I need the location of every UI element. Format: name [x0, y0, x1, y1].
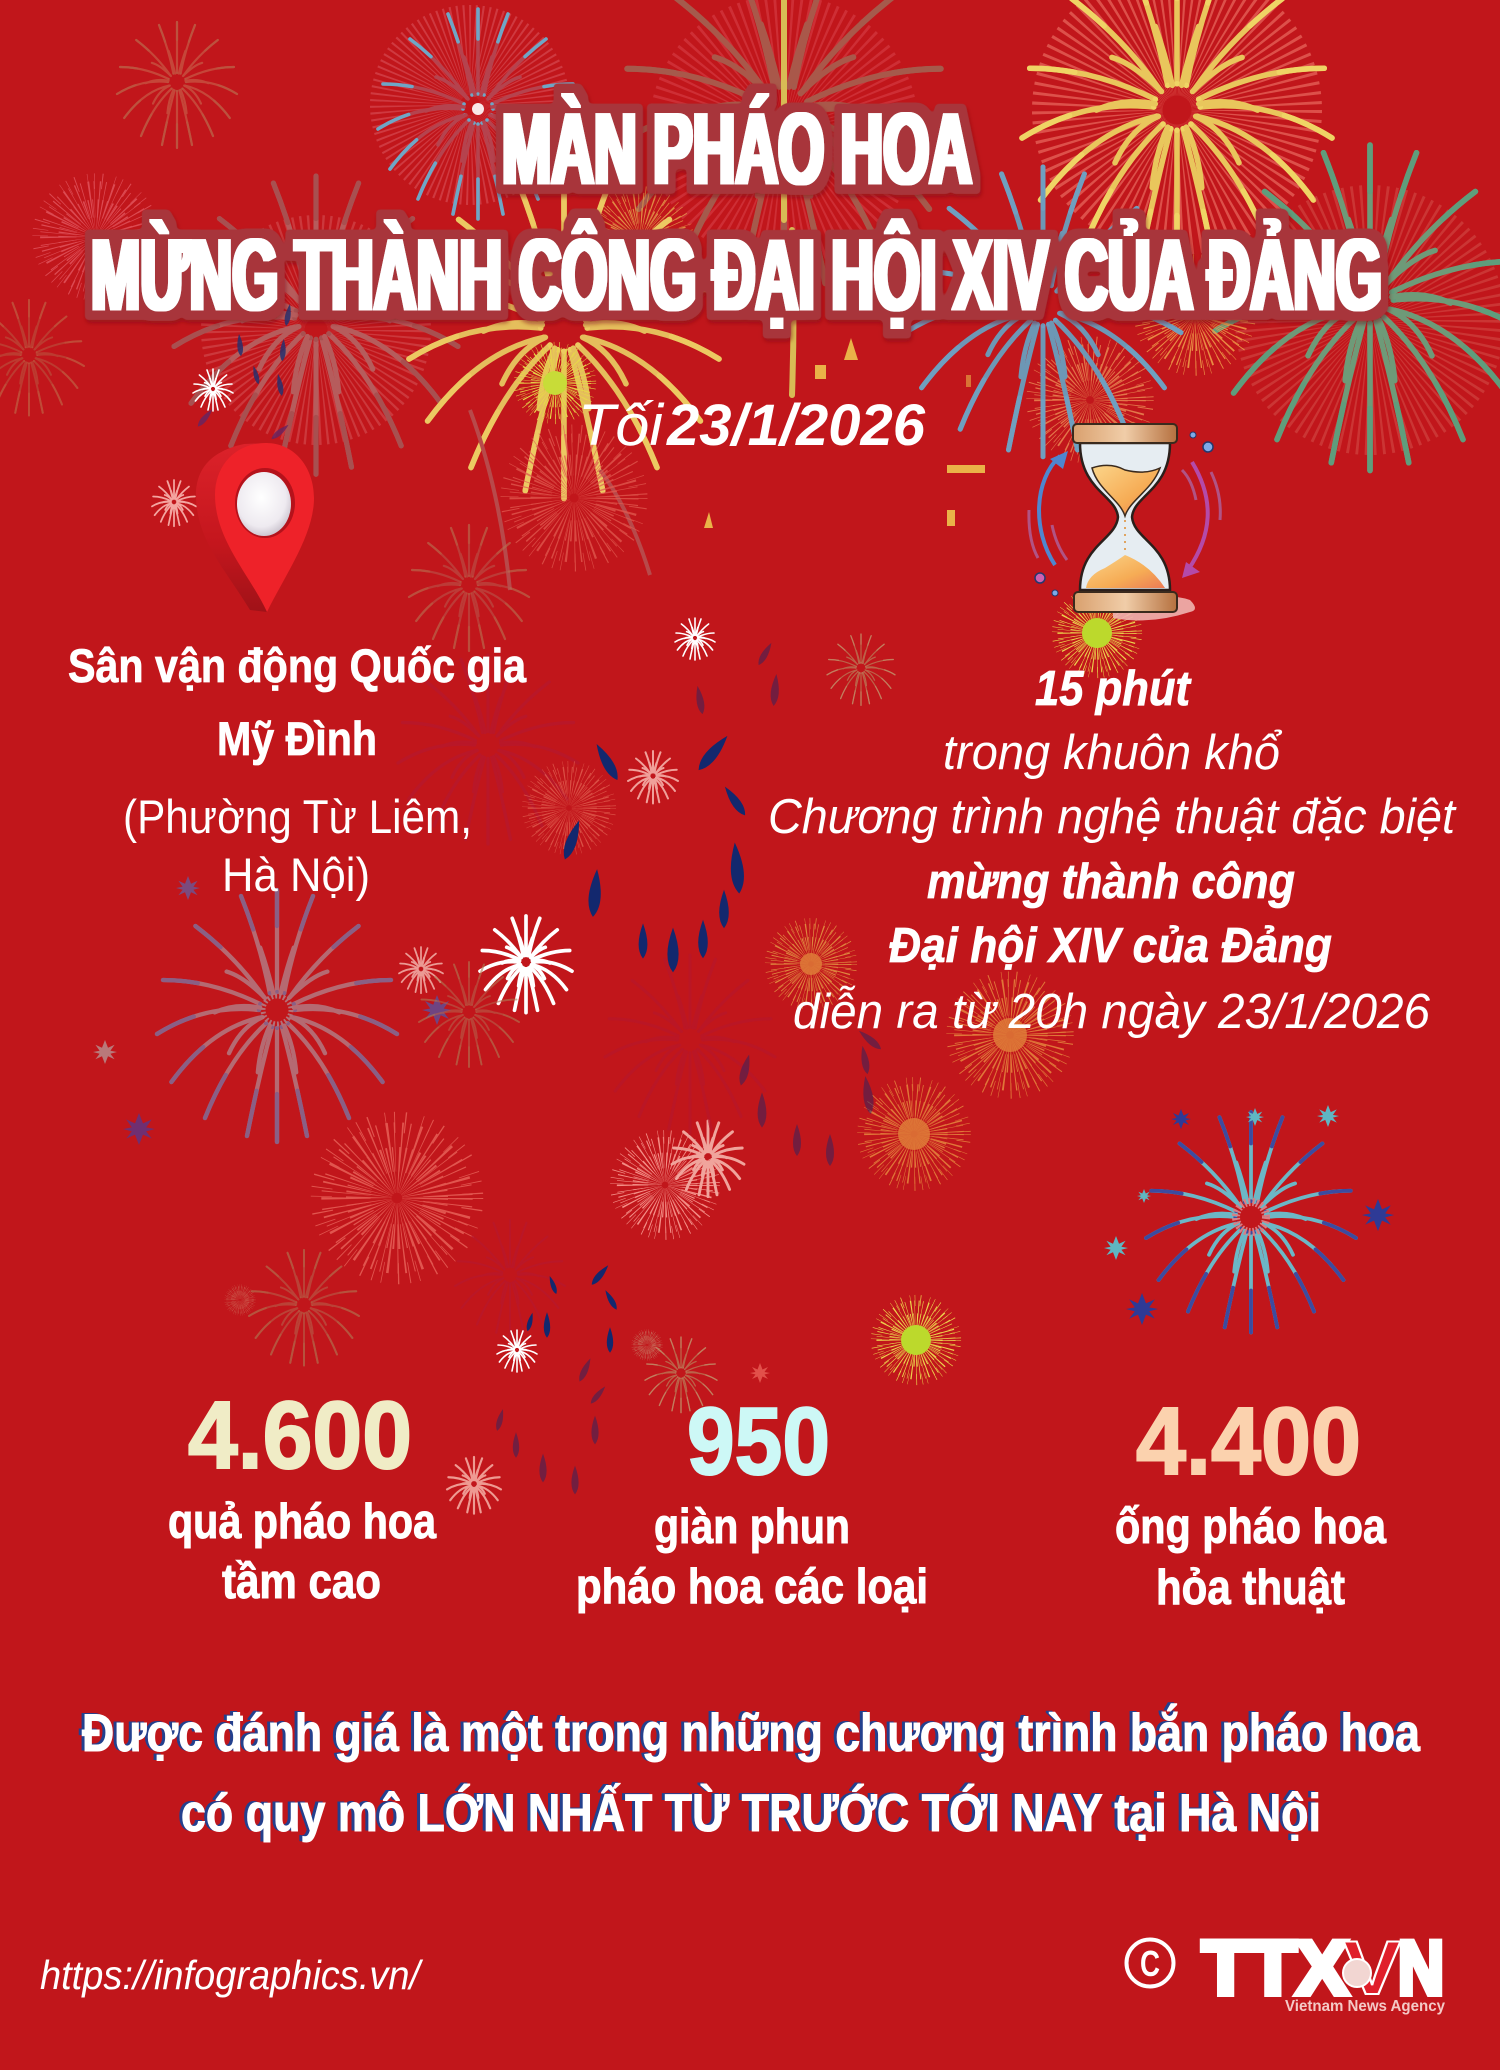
- text block: programme: Đại hội XIV của Đảng: [889, 919, 1332, 973]
- text block: programme: Chương trình nghệ thuật đặc biệt: [768, 790, 1457, 844]
- text block: venue: [68, 639, 527, 901]
- logo: TTXVN: Vietnam News Agency: [1285, 1998, 1445, 2015]
- text block: programme: [768, 662, 1457, 1039]
- logo: TTXVN: N: [1398, 1926, 1444, 2011]
- text block: programme: mừng thành công: [927, 855, 1295, 909]
- confetti: [704, 338, 985, 528]
- text block: programme: diễn ra từ 20h ngày 23/1/2026: [793, 985, 1431, 1039]
- logo: TTXVN: [1126, 1926, 1445, 2015]
- text block: programme: trong khuôn khổ: [943, 726, 1283, 780]
- text block: venue: Sân vận động Quốc gia: [68, 639, 527, 692]
- navy firework drops: centre: [560, 641, 883, 1166]
- stat: 950: [576, 1388, 928, 1614]
- title: MÀN PHÁO HOA: [502, 92, 972, 206]
- navy firework drops: lower: [494, 1263, 619, 1494]
- text block: venue: Mỹ Đình: [217, 712, 377, 765]
- icon: location pin: [196, 443, 314, 612]
- stat: 4.600: quả pháo hoa: [168, 1495, 437, 1549]
- stat: 950: pháo hoa các loại: [576, 1560, 928, 1614]
- stat: 4.400: 4.400: [1136, 1388, 1361, 1495]
- date: Tối: [578, 393, 665, 458]
- firework: teal and navy burst: [1104, 1105, 1394, 1332]
- stat: 4.400: ống pháo hoa: [1115, 1500, 1387, 1554]
- fireworks background: navy streaks near the left burst: [196, 303, 293, 441]
- icon: hourglass: [1029, 424, 1220, 620]
- fireworks background: middle: [93, 593, 1137, 1274]
- closing statement: có quy mô LỚN NHẤT TỪ TRƯỚC TỚI NAY tại Hà Nội: [181, 1783, 1321, 1843]
- title: [91, 92, 1382, 332]
- stat: 950: 950: [687, 1388, 830, 1495]
- date: 23/1/2026: [666, 393, 926, 458]
- fireworks background: top: [0, 0, 1500, 651]
- fireworks background: lower: [226, 1220, 956, 1514]
- text block: programme: 15 phút: [1035, 662, 1191, 716]
- closing statement: [82, 1703, 1420, 1843]
- logo: TTXVN: TTX: [1202, 1926, 1348, 2011]
- logo: TTXVN: V: [1343, 1926, 1401, 2011]
- stat: 4.400: [1115, 1388, 1387, 1615]
- logo: TTXVN: C: [1140, 1943, 1160, 1984]
- text block: venue: Hà Nội): [222, 848, 370, 901]
- stat: 950: giàn phun: [654, 1500, 850, 1554]
- stat: 4.600: tầm cao: [222, 1555, 381, 1609]
- source url: https://infographics.vn/: [40, 1952, 423, 1998]
- stat: 4.400: hỏa thuật: [1156, 1561, 1345, 1615]
- stat: 4.600: [168, 1382, 437, 1609]
- text block: venue: (Phường Từ Liêm,: [123, 790, 472, 843]
- stat: 4.600: 4.600: [188, 1382, 412, 1489]
